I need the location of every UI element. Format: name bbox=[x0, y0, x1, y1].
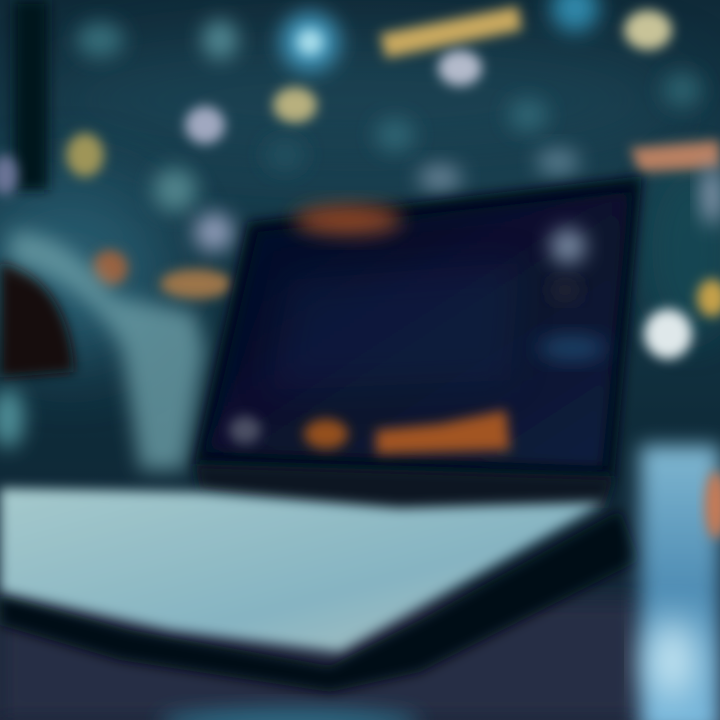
screen: side widgets bbox=[538, 228, 606, 360]
screen: faint grid bbox=[270, 262, 520, 390]
light: yellow bar top bbox=[380, 6, 522, 58]
laptop screen bbox=[206, 192, 630, 466]
laptop lid bbox=[194, 176, 642, 478]
laptop base bbox=[0, 488, 640, 692]
figure: pale teal hand shape bbox=[0, 232, 205, 470]
base shadow edge bbox=[0, 510, 640, 692]
right light column bbox=[640, 445, 720, 720]
base top surface bbox=[0, 488, 606, 652]
screen: orange header bbox=[294, 205, 402, 235]
light: orange bar right bbox=[630, 140, 720, 172]
figure: dark arc at left bbox=[0, 262, 74, 378]
screen: orange bar chart bbox=[229, 410, 510, 454]
laptop hinge shadow bbox=[195, 464, 614, 514]
laptop bbox=[194, 176, 642, 478]
table reflection bbox=[0, 600, 640, 720]
bokeh lights bbox=[0, 0, 720, 359]
light: orange spot bbox=[705, 471, 720, 539]
